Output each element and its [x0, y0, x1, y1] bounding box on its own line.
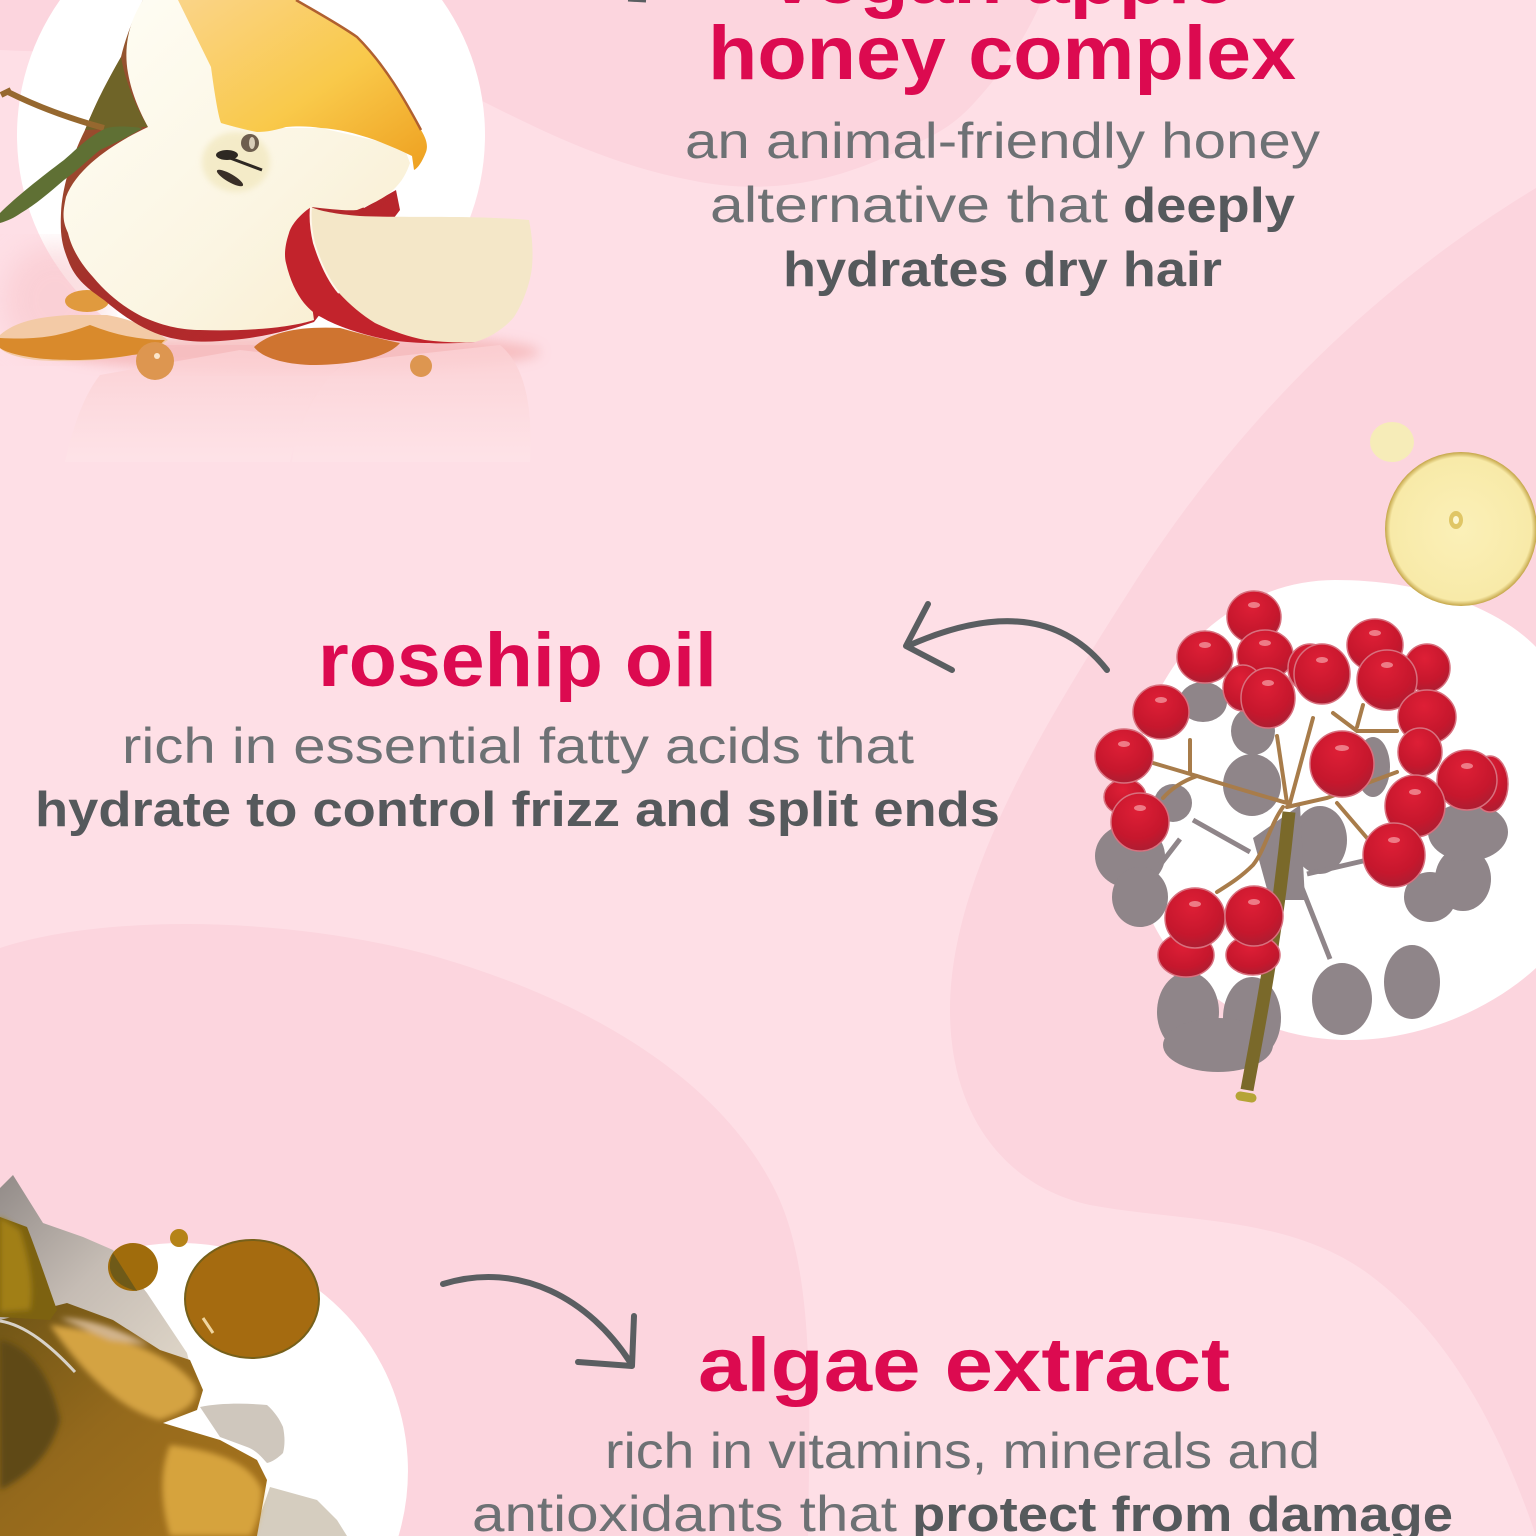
silver streak on algae	[0, 1321, 75, 1372]
red berries	[1095, 591, 1508, 977]
text block: honey complex description: hydrates dry hair	[783, 243, 1222, 297]
ingredient: apple with honey	[0, 0, 540, 462]
text block: algae extract description	[472, 1423, 1453, 1536]
arrow tail above heading	[628, 0, 646, 1]
algae shadows	[0, 1175, 347, 1536]
text block: honey complex description	[685, 113, 1320, 297]
apple core and seeds	[202, 132, 270, 192]
apple leaf	[0, 126, 143, 223]
heading: algae extract: algae extract	[698, 1323, 1230, 1408]
heading: vegan apple honey complex: honey complex	[708, 11, 1296, 96]
arrow: algae to algae extract	[443, 1277, 634, 1366]
text block: rosehip oil description	[35, 718, 1000, 837]
berry shadows	[1095, 682, 1508, 1072]
berry stems	[1153, 705, 1397, 1098]
algae highlights	[0, 1217, 262, 1536]
text block: honey complex description: an animal-friendly honey	[685, 113, 1320, 169]
text block: honey complex description: deeply	[1123, 179, 1295, 233]
ingredient: rosehip berries and oil	[1095, 422, 1536, 1098]
algae body	[0, 1303, 267, 1536]
text block: rosehip oil description: rich in essential fatty acids that	[122, 718, 914, 774]
berry highlights	[1118, 602, 1473, 907]
ingredient: algae with oil drops	[0, 1175, 408, 1536]
text block: rosehip oil description: hydrate to control frizz and split ends	[35, 783, 1000, 837]
white circle behind apple	[17, 0, 485, 369]
algae dark fold	[0, 1217, 57, 1320]
oil drops	[108, 1229, 319, 1358]
text block: algae extract description: rich in vitamins, minerals and	[605, 1423, 1320, 1479]
white circle behind algae	[0, 1243, 408, 1536]
apple stem	[1, 90, 104, 128]
arrow: berries to rosehip oil	[906, 604, 1107, 670]
apple half	[61, 0, 427, 342]
floor and reflection	[3, 245, 540, 462]
apple slice	[285, 207, 533, 343]
white circle behind berries	[1130, 580, 1536, 1040]
text block: honey complex description: alternative that	[710, 177, 1108, 233]
honey puddles	[0, 290, 432, 380]
heading: rosehip oil: rosehip oil	[318, 618, 717, 703]
oil drops	[1370, 422, 1536, 606]
